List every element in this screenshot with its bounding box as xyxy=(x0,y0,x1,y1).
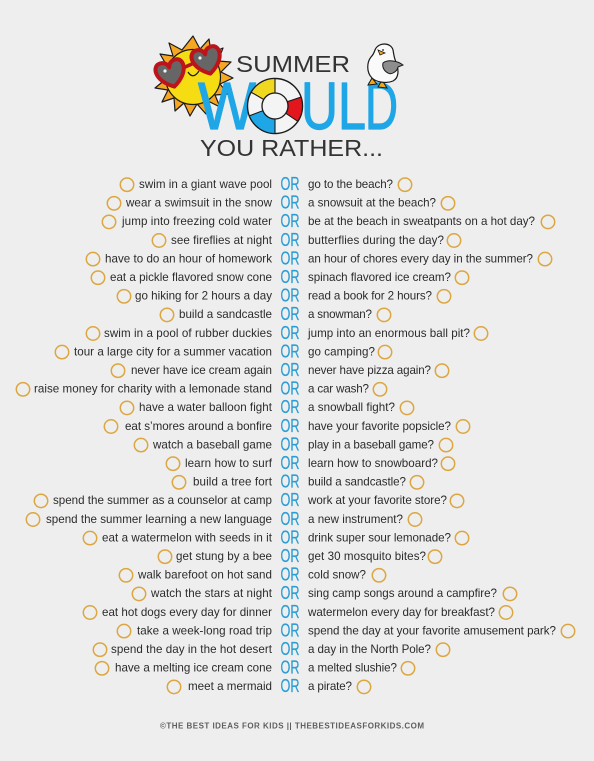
row 6: spinach flavored ice cream? xyxy=(308,271,452,284)
title block xyxy=(154,36,403,161)
row 28: OR xyxy=(280,675,300,696)
heading: WOULD: W xyxy=(198,69,257,144)
row 22: OR xyxy=(280,564,300,585)
row 27: OR xyxy=(280,657,300,678)
row 11: never have pizza again? xyxy=(308,364,432,377)
row 4: OR xyxy=(280,229,300,250)
row 13: OR xyxy=(280,396,300,417)
row 2 xyxy=(107,192,455,213)
row 15: play in a baseball game? xyxy=(308,438,435,451)
row 14 xyxy=(104,415,470,436)
row 27: have a melting ice cream cone xyxy=(115,662,272,675)
row 23: sing camp songs around a campfire? xyxy=(308,587,498,600)
row 10: OR xyxy=(280,340,300,361)
row 5: OR xyxy=(280,247,300,268)
row 18 xyxy=(34,489,464,510)
row 18: work at your favorite store? xyxy=(307,494,448,507)
row 22: walk barefoot on hot sand xyxy=(137,569,272,582)
row 16: OR xyxy=(280,452,300,473)
row 26: a day in the North Pole? xyxy=(308,643,432,656)
row 10 xyxy=(55,340,392,361)
row 2: a snowsuit at the beach? xyxy=(308,197,437,210)
row 23: watch the stars at night xyxy=(150,587,273,600)
row 16: learn how to surf xyxy=(185,457,273,470)
row 24: OR xyxy=(280,601,300,622)
row 28: a pirate? xyxy=(308,680,353,693)
row 15: OR xyxy=(280,433,300,454)
row 12: raise money for charity with a lemonade stand xyxy=(34,383,272,396)
row 4 xyxy=(152,229,461,250)
question list xyxy=(16,173,575,696)
row 7: go hiking for 2 hours a day xyxy=(135,290,272,303)
row 11: never have ice cream again xyxy=(131,364,272,377)
footer credit: ©THE BEST IDEAS FOR KIDS || THEBESTIDEASFORKIDS.COM xyxy=(160,722,424,730)
heading: WOULD: D xyxy=(365,69,398,144)
row 14: eat s’mores around a bonfire xyxy=(125,420,272,433)
row 14: OR xyxy=(280,415,300,436)
row 1: go to the beach? xyxy=(308,178,394,191)
row 10: go camping? xyxy=(308,345,376,358)
row 8: a snowman? xyxy=(308,308,373,321)
row 24: watermelon every day for breakfast? xyxy=(307,606,496,619)
row 13: a snowball fight? xyxy=(308,401,396,414)
row 21 xyxy=(158,545,442,566)
row 24: eat hot dogs every day for dinner xyxy=(102,606,272,619)
row 25: take a week-long road trip xyxy=(137,624,272,637)
row 17: build a sandcastle? xyxy=(308,476,407,489)
row 27: a melted slushie? xyxy=(308,662,398,675)
row 5: an hour of chores every day in the summer? xyxy=(308,252,534,265)
row 17: OR xyxy=(280,471,300,492)
row 12: a car wash? xyxy=(308,383,370,396)
row 3 xyxy=(102,210,555,231)
row 17 xyxy=(172,471,424,492)
row 2: OR xyxy=(280,192,300,213)
row 20: drink super sour lemonade? xyxy=(308,531,452,544)
row 1: OR xyxy=(280,173,300,194)
row 6 xyxy=(91,266,469,287)
row 11 xyxy=(111,359,449,380)
row 16 xyxy=(166,452,455,473)
row 26: spend the day in the hot desert xyxy=(111,643,273,656)
row 13: have a water balloon fight xyxy=(139,401,273,414)
heading: WOULD: U xyxy=(301,69,338,144)
row 9: swim in a pool of rubber duckies xyxy=(104,327,272,340)
row 18: OR xyxy=(280,489,300,510)
row 28: meet a mermaid xyxy=(188,680,272,693)
row 4: butterflies during the day? xyxy=(308,234,445,247)
row 5 xyxy=(86,247,552,268)
row 8: OR xyxy=(280,303,300,324)
row 12 xyxy=(16,378,387,399)
row 18: spend the summer as a counselor at camp xyxy=(53,494,272,507)
row 22 xyxy=(119,564,386,585)
heading: WOULD: L xyxy=(338,69,366,144)
row 25: spend the day at your favorite amusement park? xyxy=(308,624,557,637)
row 19 xyxy=(26,508,422,529)
row 7: read a book for 2 hours? xyxy=(308,290,433,303)
row 15: watch a baseball game xyxy=(152,438,272,451)
row 19: a new instrument? xyxy=(308,513,404,526)
row 9: jump into an enormous ball pit? xyxy=(307,327,471,340)
row 17: build a tree fort xyxy=(193,476,273,489)
heading: SUMMER: SUMMER xyxy=(236,51,350,77)
heading: YOU RATHER: YOU RATHER... xyxy=(200,135,383,161)
row 8 xyxy=(160,303,391,324)
row 5: have to do an hour of homework xyxy=(105,252,272,265)
row 9 xyxy=(86,322,488,343)
row 23 xyxy=(132,582,517,603)
row 3: be at the beach in sweatpants on a hot day? xyxy=(308,215,536,228)
row 9: OR xyxy=(280,322,300,343)
row 23: OR xyxy=(280,582,300,603)
icon: sun with heart sunglasses xyxy=(154,36,233,116)
row 14: have your favorite popsicle? xyxy=(308,420,452,433)
row 10: tour a large city for a summer vacation xyxy=(74,345,272,358)
icon: swim ring xyxy=(248,78,303,134)
row 6: OR xyxy=(280,266,300,287)
row 22: cold snow? xyxy=(308,569,367,582)
row 27 xyxy=(95,657,415,678)
row 3: OR xyxy=(280,210,300,231)
row 4: see fireflies at night xyxy=(171,234,273,247)
row 26 xyxy=(93,638,450,659)
row 24 xyxy=(83,601,513,622)
row 7 xyxy=(117,285,451,306)
row 20 xyxy=(83,526,469,547)
row 19: spend the summer learning a new language xyxy=(46,513,272,526)
row 20: OR xyxy=(280,526,300,547)
row 25 xyxy=(117,619,575,640)
row 20: eat a watermelon with seeds in it xyxy=(102,531,273,544)
row 21: OR xyxy=(280,545,300,566)
row 3: jump into freezing cold water xyxy=(121,215,272,228)
row 19: OR xyxy=(280,508,300,529)
heading: WOULD: O xyxy=(250,69,300,144)
row 6: eat a pickle flavored snow cone xyxy=(110,271,272,284)
row 28 xyxy=(167,675,371,696)
row 11: OR xyxy=(280,359,300,380)
row 21: get 30 mosquito bites? xyxy=(308,550,427,563)
row 12: OR xyxy=(280,378,300,399)
row 16: learn how to snowboard? xyxy=(308,457,439,470)
row 8: build a sandcastle xyxy=(179,308,272,321)
row 15 xyxy=(134,433,453,454)
icon: seagull xyxy=(368,44,403,88)
row 1: swim in a giant wave pool xyxy=(139,178,272,191)
row 7: OR xyxy=(280,285,300,306)
row 21: get stung by a bee xyxy=(176,550,272,563)
heading: WOULD xyxy=(198,69,398,144)
row 1 xyxy=(120,173,412,194)
row 26: OR xyxy=(280,638,300,659)
row 2: wear a swimsuit in the snow xyxy=(125,197,273,210)
row 25: OR xyxy=(280,619,300,640)
row 13 xyxy=(120,396,414,417)
